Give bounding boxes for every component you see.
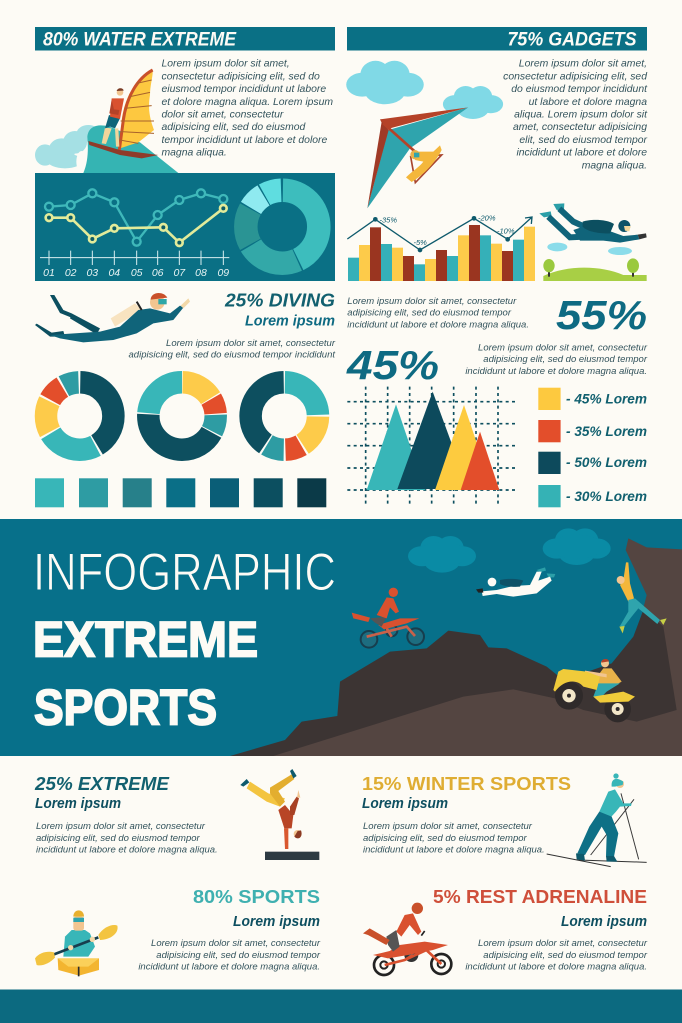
panel: line chart and donut bbox=[35, 173, 335, 281]
icon: handstand bbox=[240, 769, 319, 860]
icon: motocross rider bbox=[352, 588, 424, 648]
text block: gadgets description: elit, sed do eiusmod tempor bbox=[519, 135, 648, 146]
text block: extreme description: Lorem ipsum dolor sit amet, consectetur bbox=[36, 821, 205, 832]
legend: - 50% Lorem bbox=[566, 454, 647, 470]
text block: 45% description: Lorem ipsum dolor sit amet, consectetur bbox=[478, 342, 647, 354]
mountain chart with dashed grid bbox=[347, 387, 517, 505]
text block: sports description: incididunt ut labore et dolore magna aliqua. bbox=[138, 962, 320, 973]
text block: gadgets description: do eiusmod tempor incididunt bbox=[511, 84, 648, 95]
illustration: mountains and riders bbox=[230, 528, 682, 756]
text block: 45% description: adipisicing elit, sed do eiusmod tempor bbox=[483, 354, 648, 365]
stat: 45%: 45% bbox=[346, 342, 439, 388]
text block: winter sports description: Lorem ipsum dolor sit amet, consectetur bbox=[363, 821, 532, 832]
chart axis labels: 05 bbox=[131, 267, 143, 279]
subheading: lorem ipsum: Lorem ipsum bbox=[35, 796, 121, 812]
chart axis labels: 02 bbox=[65, 267, 77, 279]
icon: windsurfer on wave bbox=[35, 70, 178, 173]
text block: gadgets description: magna aliqua. bbox=[582, 160, 647, 171]
icon: clouds bbox=[346, 61, 503, 119]
icon: quad bike rider bbox=[553, 659, 635, 722]
chart labels: -5% bbox=[414, 238, 427, 247]
legend: - 45% Lorem bbox=[566, 390, 647, 406]
donut chart 1 bbox=[46, 382, 113, 450]
panel: 5% rest adrenaline bbox=[433, 886, 648, 973]
text block: adrenaline description: incididunt ut labore et dolore magna aliqua. bbox=[465, 962, 647, 973]
donut chart 3 bbox=[251, 382, 318, 450]
icon: climber bbox=[617, 562, 667, 633]
text block: adrenaline description: adipisicing elit, sed do eiusmod tempor bbox=[483, 950, 648, 961]
text block: gadgets description: Lorem ipsum dolor sit amet, bbox=[519, 59, 647, 70]
line chart bbox=[40, 189, 229, 265]
chart labels: -35% bbox=[380, 216, 397, 224]
text block: water extreme description: tempor incididunt ut labore et dolore bbox=[162, 135, 327, 146]
legend bbox=[538, 388, 647, 507]
heading: 5% rest adrenaline: 5% REST ADRENALINE bbox=[433, 886, 647, 907]
text block: water extreme description: et dolore magna aliqua. Lorem ipsum bbox=[162, 97, 333, 108]
icon: motocross rider large bbox=[363, 903, 451, 975]
icon: skydiver over hill bbox=[539, 203, 647, 281]
colour swatches bbox=[35, 478, 326, 507]
chart axis labels: 01 bbox=[43, 267, 55, 279]
text block: gadgets description: ut labore et dolore magna bbox=[529, 97, 647, 108]
bar chart with trend line bbox=[347, 216, 535, 281]
text block: 55% description: adipisicing elit, sed do eiusmod tempor bbox=[347, 308, 512, 319]
icon: kayaker bbox=[35, 910, 118, 976]
title: sports: SPORTS bbox=[34, 680, 217, 736]
text block: 45% description: incididunt ut labore et dolore magna aliqua. bbox=[465, 366, 647, 377]
donut chart 2 bbox=[148, 382, 216, 450]
heading: 75% gadgets bbox=[347, 27, 647, 50]
panel: diving bbox=[35, 290, 336, 507]
subheading: lorem ipsum: Lorem ipsum bbox=[245, 314, 335, 330]
text block: water extreme description: dolor sit amet, consectetur bbox=[162, 110, 284, 120]
text block: adrenaline description: Lorem ipsum dolor sit amet, consectetur bbox=[478, 938, 647, 949]
text block: water extreme description: adipisicing elit, sed do eiusmod bbox=[162, 122, 307, 133]
heading: 80% water extreme bbox=[35, 27, 335, 50]
icon: diver bbox=[35, 293, 190, 342]
chart axis labels: 06 bbox=[152, 267, 164, 279]
panel: gadgets bbox=[346, 27, 648, 281]
heading: 15% winter sports: 15% WINTER SPORTS bbox=[362, 773, 571, 794]
mountains bbox=[230, 538, 682, 756]
chart axis labels: 09 bbox=[217, 267, 229, 279]
text block: water extreme description: consectetur adipisicing elit, sed do bbox=[162, 71, 320, 82]
text block: water extreme description: Lorem ipsum dolor sit amet, bbox=[162, 59, 290, 70]
panel: 80% sports bbox=[138, 886, 321, 973]
footer bar bbox=[0, 990, 682, 1023]
icon: skier bbox=[547, 773, 647, 867]
chart axis labels: 07 bbox=[173, 267, 186, 279]
text block: sports description: adipisicing elit, sed do eiusmod tempor bbox=[156, 950, 321, 961]
text block: diving description: adipisicing elit, sed do eiusmod tempor incididunt bbox=[129, 350, 335, 360]
chart labels bbox=[380, 214, 515, 247]
text block: winter sports description: incididunt ut labore et dolore magna aliqua. bbox=[363, 845, 545, 856]
title: extreme: EXTREME bbox=[33, 612, 258, 668]
panel: 15% winter sports bbox=[0, 773, 682, 1023]
chart axis labels bbox=[43, 267, 229, 279]
legend: - 35% Lorem bbox=[566, 423, 647, 439]
text block: extreme description: incididunt ut labore et dolore magna aliqua. bbox=[36, 845, 218, 856]
chart labels: -10% bbox=[497, 226, 515, 236]
legend: - 30% Lorem bbox=[566, 488, 647, 504]
title: infographic: INFOGRAPHIC bbox=[33, 543, 336, 602]
panel: percent stats and mountain chart bbox=[346, 292, 648, 507]
text block: water extreme description: magna aliqua. bbox=[162, 148, 227, 159]
text block: extreme description: adipisicing elit, sed do eiusmod tempor bbox=[36, 833, 201, 844]
chart axis labels: 03 bbox=[86, 267, 98, 279]
stat: 55%: 55% bbox=[556, 292, 647, 338]
chart axis labels: 08 bbox=[195, 267, 207, 279]
heading: 25% diving: 25% DIVING bbox=[224, 290, 335, 310]
heading: 80% sports: 80% SPORTS bbox=[193, 886, 320, 907]
heading: 25% extreme: 25% EXTREME bbox=[34, 773, 170, 794]
chart labels: -20% bbox=[478, 214, 496, 222]
text block: sports description: Lorem ipsum dolor sit amet, consectetur bbox=[151, 938, 320, 949]
icon: hang glider bbox=[367, 107, 468, 208]
text block: 55% description: incididunt ut labore et dolore magna aliqua. bbox=[347, 319, 529, 330]
text block: gadgets description: aliqua. Lorem ipsum dolor sit bbox=[514, 110, 648, 120]
icon: white skydiver bbox=[476, 567, 555, 597]
icon: banner clouds bbox=[408, 528, 611, 573]
banner: infographic extreme sports bbox=[0, 519, 682, 756]
text block: water extreme description: eiusmod tempor incididunt ut labore bbox=[162, 84, 326, 95]
subheading: lorem ipsum: Lorem ipsum bbox=[362, 796, 448, 812]
subheading: lorem ipsum: Lorem ipsum bbox=[233, 914, 320, 930]
text block: gadgets description: incididunt ut labore et dolore bbox=[516, 148, 647, 159]
donut chart bbox=[246, 190, 319, 263]
text block: gadgets description: consectetur adipisicing elit, sed bbox=[503, 71, 648, 82]
chart axis labels: 04 bbox=[108, 267, 120, 279]
text block: gadgets description: amet, consectetur adipisicing bbox=[513, 122, 647, 133]
panel: water extreme bbox=[35, 27, 335, 281]
heading: 80% water extreme: 80% WATER EXTREME bbox=[43, 30, 237, 50]
subheading: lorem ipsum: Lorem ipsum bbox=[561, 914, 647, 930]
panel: 25% extreme bbox=[34, 769, 321, 973]
text block: 55% description: Lorem ipsum dolor sit amet, consectetur bbox=[347, 296, 516, 307]
text block: diving description: Lorem ipsum dolor sit amet, consectetur bbox=[166, 338, 335, 349]
text block: winter sports description: adipisicing elit, sed do eiusmod tempor bbox=[363, 833, 528, 844]
heading: 75% gadgets: 75% GADGETS bbox=[508, 30, 637, 50]
